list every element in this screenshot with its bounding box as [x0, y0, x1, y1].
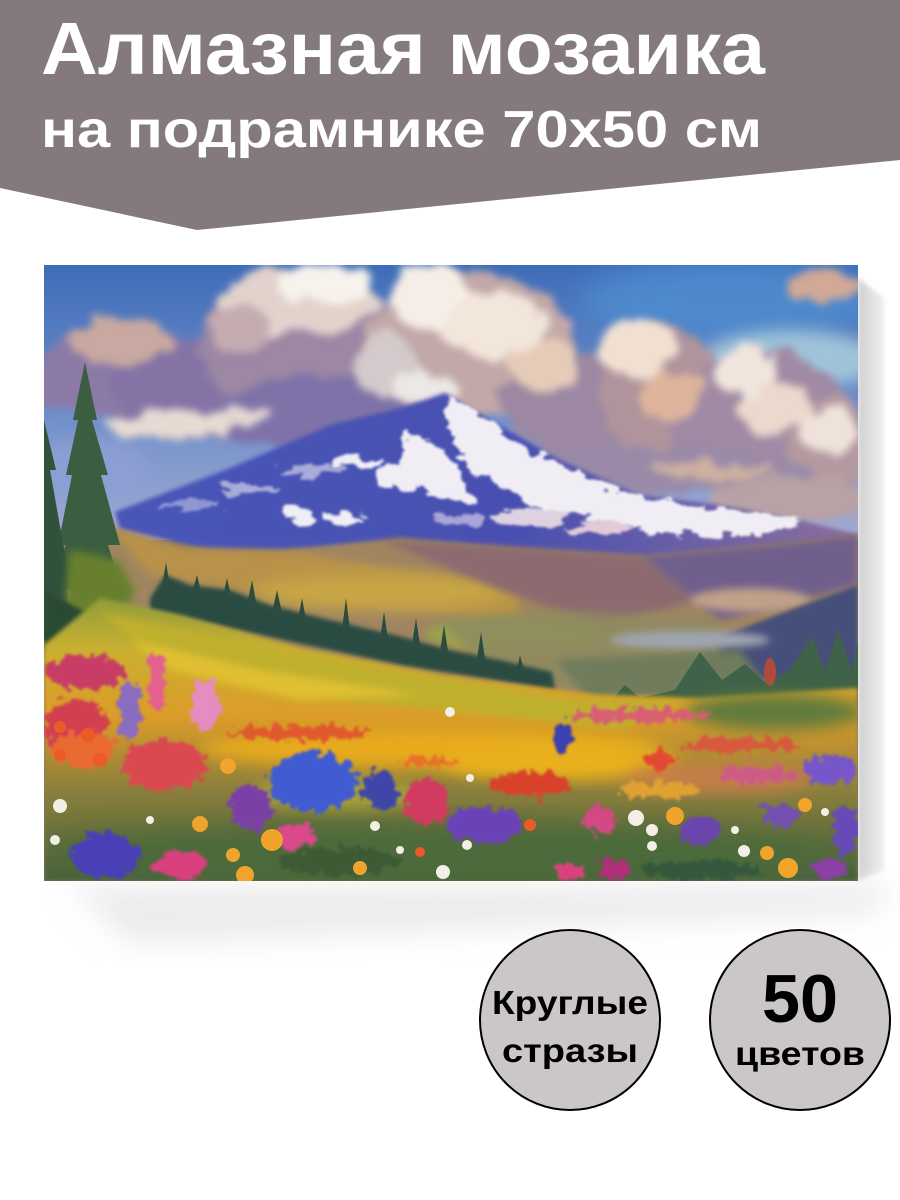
badge: 50 colours: 50: [762, 961, 838, 1037]
distant hills: [44, 525, 858, 700]
header banner: [0, 0, 900, 230]
snow patches: [158, 398, 800, 535]
clouds: [35, 265, 870, 524]
badge: round rhinestones: стразы: [502, 1032, 638, 1069]
badge: round rhinestones: [480, 930, 660, 1110]
badge: 50 colours: [710, 930, 890, 1110]
title: Алмазная мозаика: [41, 7, 766, 90]
tree line: [150, 562, 555, 690]
daisies and small blooms: [50, 707, 829, 884]
badge: 50 colours: цветов: [735, 1035, 865, 1072]
meadow: [44, 598, 865, 887]
wildflower drifts: [43, 654, 858, 881]
painting: mountain meadow: [30, 260, 880, 887]
cloud highlights: [65, 265, 867, 480]
cloud shadow masses: [35, 275, 870, 524]
ground base: [44, 540, 858, 881]
canvas drop shadow: [70, 278, 895, 945]
badge: round rhinestones: Круглые: [492, 984, 648, 1021]
mountain: [113, 390, 858, 558]
subtitle: на подрамнике 70x50 см: [41, 101, 762, 159]
large pine trees: [44, 362, 135, 650]
right-hand tree line: [610, 630, 858, 705]
sky: [44, 265, 858, 540]
